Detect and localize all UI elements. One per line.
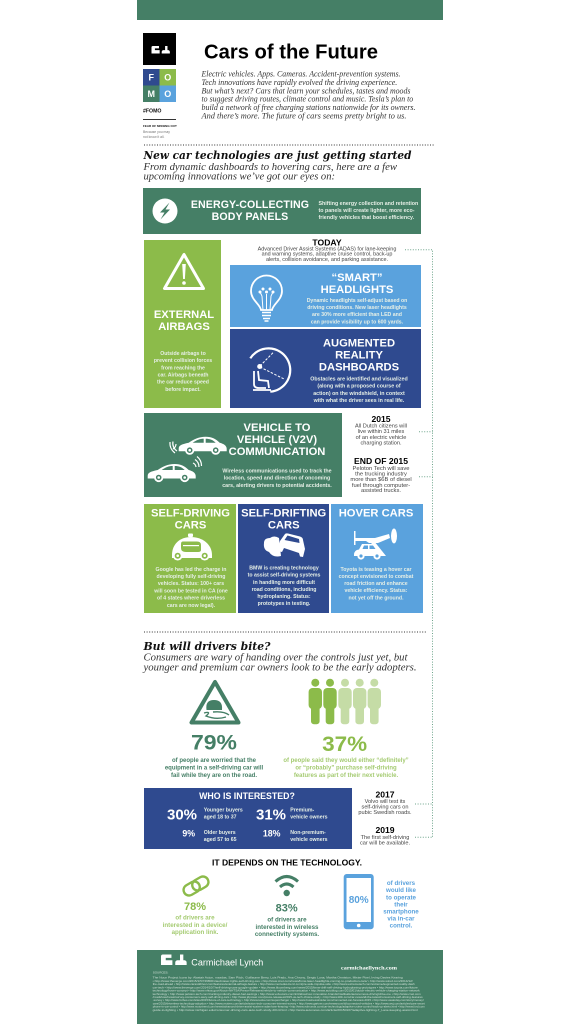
panel description: before impact.: [165, 387, 201, 393]
panel description: developing fully self-driving: [157, 574, 225, 580]
panel description: vehicles. Status: 100+ cars: [158, 581, 224, 587]
section heading: new technologies: From dynamic dashboards to hovering cars, here are a few: [143, 161, 398, 173]
FOMO tile grid: O: [164, 89, 171, 99]
section heading: will drivers bite: younger and premium car owners look to be the early adopters.: [143, 662, 417, 674]
panel description: with what the driver sees in real life.: [313, 398, 405, 404]
panel description: the car reduce speed: [157, 380, 209, 386]
timeline: today: TODAY: [312, 237, 342, 247]
panel description: action) on the windshield, in context: [313, 391, 405, 397]
stat: premium owners: [256, 806, 328, 824]
section heading: new technologies: New car technologies are just getting started: [143, 148, 411, 162]
timeline: 2019: 2019: [375, 825, 395, 835]
panel: vehicle to vehicle communication: [144, 413, 342, 497]
panel description: of 4 states where driverless: [157, 596, 225, 602]
stat caption: of drivers: [387, 880, 416, 887]
stat caption: or “probably” purchase self-driving: [295, 766, 397, 772]
sources: guide-to-lighting • http://www.michigan.edu/consumer-driving-cars-auto-tech-study-2014.html • http://www.autonews.com/article/20150107/adaptive-lighting-7_Lane-keeping-assist.html: [153, 1008, 418, 1012]
panel heading: AUGMENTED: [323, 338, 395, 350]
stat: 37 percent would purchase: [283, 679, 409, 779]
timeline: end of 2015: assisted trucks.: [361, 488, 401, 494]
panel heading: REALITY: [335, 350, 383, 362]
panel heading: WHO IS INTERESTED?: [199, 791, 295, 801]
stat caption: of drivers are: [267, 917, 307, 924]
panel description: to assist self-driving systems: [248, 572, 320, 578]
panel heading: SELF-DRIFTING: [241, 508, 327, 520]
header bar: [137, 0, 443, 20]
stat caption: would like: [385, 887, 417, 894]
sources: [153, 970, 425, 1012]
panel description: BMW is creating technology: [249, 566, 319, 572]
stat: non-premium owners: 18%: [263, 828, 281, 838]
icon: five people: [309, 679, 381, 724]
intro text: to suggest driving routes, climate control and music. Tesla’s plan to: [202, 95, 413, 104]
stat: non-premium owners: Non-premium-: [290, 830, 326, 836]
panel description: Toyota is teasing a hover car: [340, 567, 412, 573]
stat: older buyers: 9%: [182, 828, 195, 838]
FOMO definition: FEAR OF MISSING OUT: [143, 124, 177, 128]
panel: external airbags: [144, 240, 221, 408]
stat caption: of drivers are: [175, 915, 215, 922]
panel description: are 30% more efficient than LED and: [312, 312, 402, 318]
panel description: not yet off the ground.: [348, 596, 404, 602]
timeline: end of 2015: Peloton Tech will save: [353, 466, 409, 472]
intro text: [201, 70, 416, 120]
section heading: new technologies: [143, 148, 412, 182]
timeline: 2017: pubic Swedish roads.: [358, 810, 412, 816]
stat caption: of people said they would either “definitely”: [283, 758, 409, 764]
stat caption: features as part of their next vehicle.: [294, 773, 399, 779]
timeline: today: alerts, collision avoidance, and parking assistance.: [266, 257, 389, 263]
panel description: from reaching the: [161, 365, 205, 371]
panel: augmented reality dashboards: [230, 329, 421, 408]
panel description: prevent collision forces: [154, 358, 212, 364]
footer logo: Carmichael Lynch: [191, 958, 263, 968]
panel heading: EXTERNAL: [154, 309, 214, 321]
stat: older buyers: aged 57 to 65: [204, 837, 237, 843]
big number: 79%: [191, 730, 237, 754]
panel heading: DASHBOARDS: [319, 362, 400, 374]
footer panel: [137, 950, 443, 1024]
panel heading: CARS: [268, 520, 300, 532]
timeline: today: Advanced Driver Assist Systems (ADAS) for lane-keeping: [258, 246, 396, 252]
panel description: Obstacles are identified and visualized: [310, 376, 408, 382]
icon: drifting car: [264, 533, 305, 557]
panel description: road conditions, including: [252, 587, 316, 593]
section heading: new technologies: upcoming innovations we’ve got our eyes on:: [144, 170, 335, 182]
icon: communicating cars: [148, 437, 227, 482]
stat: premium owners: vehicle owners: [290, 814, 328, 820]
panel description: driving conditions. New laser headlights: [307, 305, 407, 311]
stat: 83 percent wireless: [255, 876, 319, 938]
timeline: 2015: 2015: [371, 414, 391, 424]
timeline: end of 2015: [350, 456, 412, 494]
sources: phone-in-car-control • http://www.motortrend.com/news/advanced-driver-assist-systems-adas-lane-keeping • http://www.edmunds.com/car-technology/adaptive-cruise-control-back-up-alerts.html • http://www.ford.com: [153, 1005, 425, 1009]
panel description: road friction and enhance: [344, 581, 408, 587]
panel: energy-collecting body panels: [143, 188, 421, 234]
section heading: will drivers bite: But will drivers bite?: [143, 639, 271, 653]
stat caption: equipment in a self-driving car will: [165, 766, 264, 772]
panel description: cars are now legal).: [167, 603, 216, 609]
timeline: today: [258, 237, 396, 263]
big number: 37%: [322, 732, 367, 756]
title: Cars of the Future: [204, 40, 378, 64]
footer logo: [161, 954, 263, 968]
panel: self-driving cars: [144, 504, 236, 613]
panel description: (along with a proposed course of: [317, 384, 401, 390]
stat: younger buyers: Younger buyers: [204, 808, 243, 814]
timeline: 2019: car will be available.: [360, 841, 410, 847]
timeline: 2015: of an electric vehicle: [356, 435, 406, 441]
stat caption: control.: [390, 923, 413, 930]
website: carmichaellynch.com: [341, 965, 398, 971]
stat number: 83%: [276, 903, 298, 915]
timeline: end of 2015: END OF 2015: [354, 456, 408, 466]
stat: older buyers: [182, 828, 237, 843]
timeline: 2015: [355, 414, 407, 447]
timeline: 2015: All Dutch citizens will: [355, 424, 407, 430]
panel heading: VEHICLE (V2V): [237, 434, 317, 446]
icon: smartphone: [344, 874, 374, 929]
panel: who is interested: [144, 788, 352, 849]
stat caption: interested in wireless: [256, 924, 319, 931]
timeline: today: and warning systems, adaptive cruise control, back-up: [262, 252, 392, 258]
panel heading: “SMART”: [332, 272, 382, 284]
panel description: concept envisioned to combat: [339, 574, 414, 580]
stat: younger buyers: [167, 806, 243, 824]
stat caption: via in-car: [387, 916, 415, 923]
icon: skid warning triangle: [192, 682, 238, 722]
panel description: car. Airbags beneath: [158, 373, 208, 379]
sources: /roadshow/news/survey-consumers-wary-self-driving-cars • http://www.jdpower.com/press-releases/2015-us-tech-choice-study • http://www.kbb.com/car-news/all-the-latest/consumers-self-driving-features: [153, 995, 423, 999]
timeline: end of 2015: fuel through computer-: [352, 483, 410, 489]
sources: -survey • http://www.forbes.com/sites/2015/future-of-cars-technology • http://www.tesla.com/supercharger • http://www.businessinsider.com/connected-car-forecast-2015 • http://www.usatoday.com/story/money/: [153, 998, 424, 1002]
intro text: But what’s next? Cars that learn your schedules, tastes and moods: [202, 86, 410, 95]
timeline: 2019: The first self-driving: [361, 835, 409, 841]
panel description: Wireless communications used to track the: [222, 468, 332, 474]
sources: SOURCES:: [153, 970, 169, 974]
panel description: will soon be tested in CA (one: [153, 588, 228, 594]
panel description: Google has led the charge in: [156, 567, 226, 573]
timeline: 2019: [360, 825, 410, 847]
sources: car-tech • http://www.theverge.com/2014/10/7/self-driving-cars-google-update • http://www.bloomberg.com/news/2015/bmw-drift-self-driving-hydroplaning-prototypes • http://www.toyota.com/future: [153, 985, 418, 989]
panel description: cars, alerting drivers to potential accidents.: [222, 483, 332, 489]
stat: younger buyers: aged 18 to 37: [204, 814, 237, 820]
sources: technology/hover-concept • http://www.nhtsa.gov/About+NHTSA/Press+Releases/vehicle-to-vehicle-communication • http://www.autoblog.com/2015/01/dutch-electric-vehicle-charging-station-network: [153, 989, 420, 993]
intro text: build a network of free charging stations nationwide for its owners.: [202, 103, 416, 112]
sources: technology • http://www.peloton-tech.com/trucking-industry-diesel-fuel-savings • http://www.volvocars.com/intl/about/our-innovation-brands/intellisafe/autonomous-driving/drive-me • http://www.cnet.com: [153, 992, 421, 996]
panel heading: CARS: [175, 520, 207, 532]
icon: hover car: [354, 528, 397, 560]
panel description: hydroplaning. Status:: [257, 594, 311, 600]
section heading: will drivers bite: Consumers are wary of handing over the controls just yet, but: [144, 652, 408, 664]
icon: wifi: [276, 876, 298, 896]
FOMO definition: Because you may: [143, 130, 170, 134]
stat caption: to operate: [386, 894, 417, 901]
panel: hover cars: [331, 504, 423, 613]
timeline: 2017: Volvo will test its: [365, 799, 406, 805]
panel: self-drifting cars: [238, 504, 329, 613]
panel description: location, speed and direction of oncoming: [224, 476, 330, 482]
panel heading: VEHICLE TO: [244, 422, 311, 434]
stat caption: application link.: [172, 929, 219, 936]
icon: lightning bolt: [152, 198, 178, 224]
panel description: Shifting energy collection and retention: [318, 201, 418, 207]
intro text: Tech innovations have rapidly evolved the driving experience.: [202, 78, 397, 87]
FOMO tile grid: [143, 69, 176, 102]
icon: self-driving car: [172, 534, 212, 560]
stat caption: fail while they are on the road.: [171, 773, 257, 779]
icon: warning triangle: [164, 254, 204, 288]
sources: • http://www.theverge.com/2015/1/5/7498001/audi-laser-lights-self-driving-ces • http://www.cnet.com/news/bmw-laser-headlights-coming-to-production-cars/ • http://www.wired.com/2014/12/: [153, 979, 413, 983]
stat: older buyers: Older buyers: [204, 830, 236, 836]
panel description: prototypes in testing.: [258, 601, 311, 607]
icon: light bulb: [251, 276, 282, 321]
panel description: friendly vehicles that boost efficiency.: [318, 215, 415, 221]
panel description: can provide visibility up to 600 yards.: [311, 319, 404, 325]
stat: premium owners: 31%: [256, 806, 286, 824]
stat caption: of people are worried that the: [172, 758, 257, 764]
stat: premium owners: Premium-: [290, 808, 314, 814]
intro text: Electric vehicles. Apps. Cameras. Accident-prevention systems.: [201, 70, 400, 78]
stat: 78 percent device link: [163, 874, 228, 936]
timeline: 2017: [358, 789, 412, 816]
panel description: in handling more difficult: [253, 580, 315, 586]
panel description: Outside airbags to: [160, 351, 206, 357]
timeline: 2015: charging station.: [360, 441, 402, 447]
intro text: And there’s more. The future of cars seems pretty bright to us.: [201, 111, 406, 120]
timeline: 2017: self-driving cars on: [362, 805, 408, 811]
stat caption: interested in a device/: [163, 922, 228, 929]
stat caption: connectivity systems.: [255, 931, 319, 938]
icon: driver and windshield: [250, 348, 290, 392]
panel heading: HOVER CARS: [339, 508, 414, 520]
FOMO tile grid: F: [148, 72, 154, 82]
stat number: 80%: [349, 895, 369, 906]
timeline: 2015: live within 31 miles: [358, 429, 405, 435]
sources: the-road-ahead • http://www.caranddriver.com/features/external-airbags-feature • http://www.mercedes-benz.com/pre-safe-impulse-side • http://www.extremetech.com/extreme/augmented-reality-dash: [153, 982, 415, 986]
stat: non-premium owners: [263, 828, 328, 843]
stat caption: their: [394, 901, 408, 908]
stat: 80 percent smartphone: [344, 874, 419, 930]
stat: non-premium owners: vehicle owners: [290, 837, 328, 843]
FOMO tile grid: O: [164, 72, 171, 82]
timeline: end of 2015: the trucking industry: [355, 472, 407, 478]
panel heading: SELF-DRIVING: [151, 508, 230, 520]
panel heading: AIRBAGS: [158, 321, 210, 333]
sources: The Noun Project Icons by: Alastair Acton, mazdas, Sam Pitch, Guillaume Berry, Luis Prado, Ana Chrony, Sergio Luna, Martha Ormiston, Mister Pixel, Irving Davies Kearing: [153, 976, 403, 980]
timeline connector: [405, 250, 432, 837]
section heading: will drivers bite: [143, 639, 417, 674]
stat: 79 percent worried: [165, 682, 264, 779]
heading: it depends on the technology: IT DEPENDS ON THE TECHNOLOGY.: [212, 857, 362, 867]
timeline: 2017: 2017: [375, 789, 395, 799]
panel description: to panels will create lighter, more eco-: [318, 208, 415, 214]
sidebar: FOMO branding: [143, 33, 177, 139]
stat: younger buyers: 30%: [167, 806, 197, 824]
stat caption: smartphone: [383, 909, 419, 916]
FOMO tile grid: M: [147, 89, 155, 99]
logo block: [143, 33, 176, 65]
panel heading: BODY PANELS: [212, 211, 288, 223]
panel heading: HEADLIGHTS: [321, 284, 394, 296]
panel heading: ENERGY-COLLECTING: [191, 199, 309, 211]
panel heading: COMMUNICATION: [229, 446, 325, 458]
hashtag: #FOMO: [143, 108, 161, 114]
stat number: 78%: [184, 901, 206, 913]
FOMO definition: not know it all.: [143, 135, 165, 139]
FOMO definition: [143, 124, 177, 139]
sources: cars/2015/driverless-technology-adoption • http://www.reuters.com/article/autos-tech-consumer-interest-survey • http://www.gartner.com/newsroom/id/connected-vehicles • http://www.wsj.com/articles/cars-smart: [153, 1001, 425, 1005]
panel description: vehicle efficiency. Status:: [344, 588, 408, 594]
icon: chain link: [182, 874, 210, 898]
timeline: end of 2015: more than $6B of diesel: [350, 477, 412, 483]
panel description: Dynamic headlights self-adjust based on: [307, 298, 407, 304]
panel: smart headlights: [230, 265, 421, 327]
